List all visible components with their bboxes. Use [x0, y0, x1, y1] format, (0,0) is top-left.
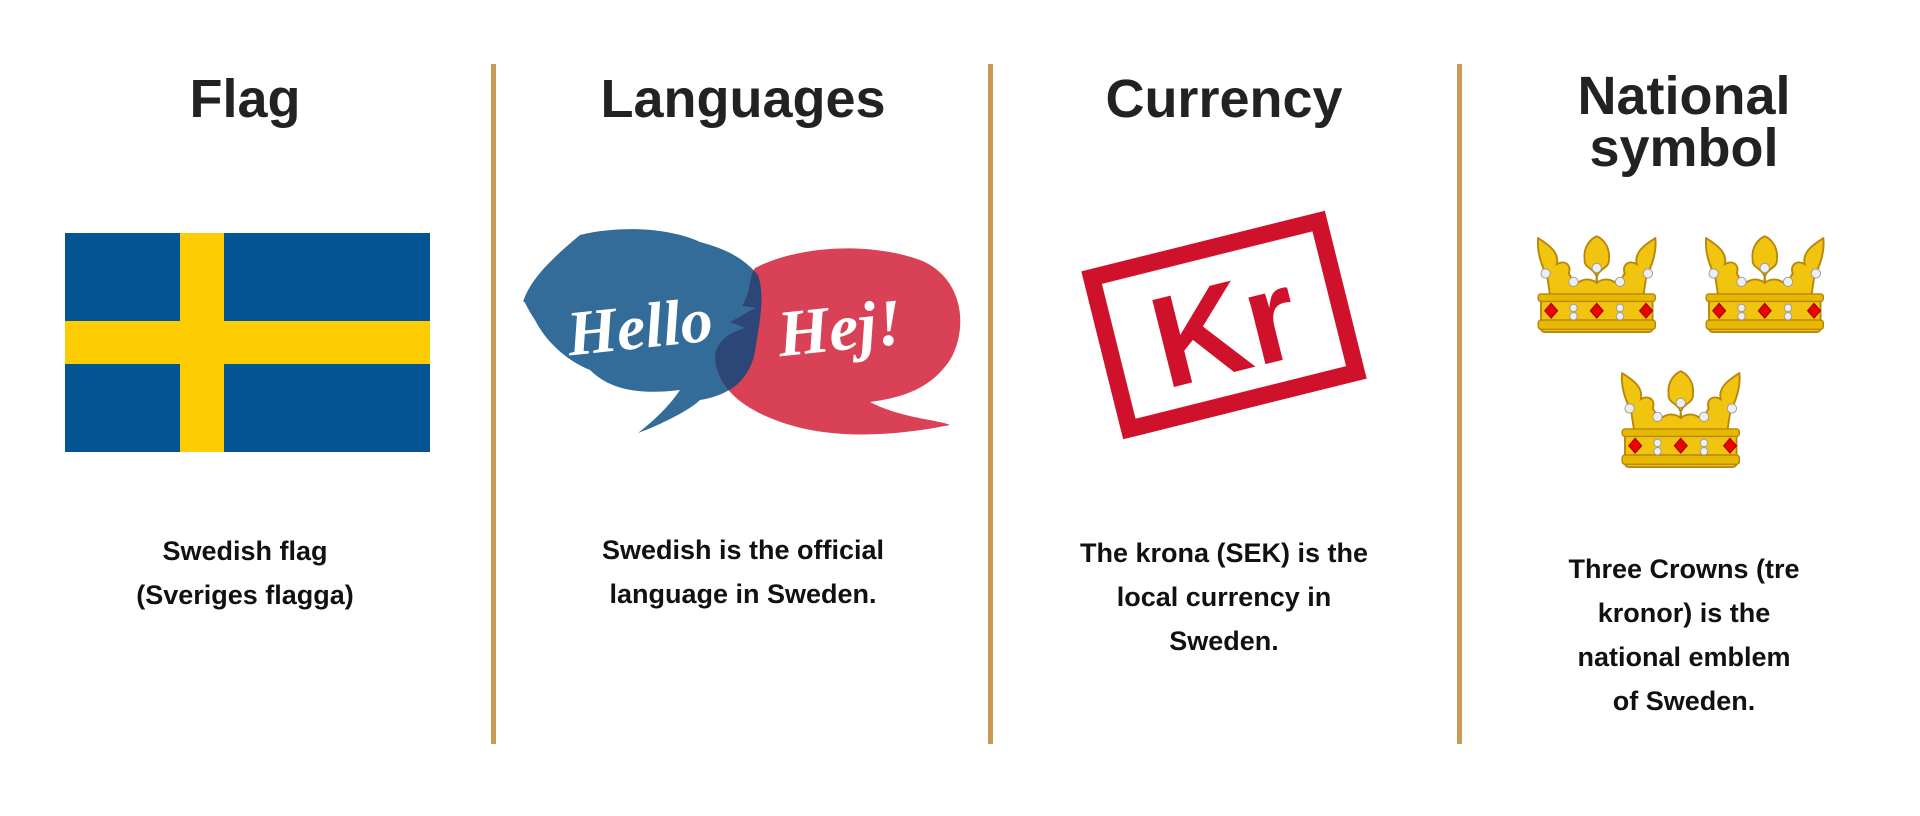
icon: Kr currency sign: [1081, 210, 1367, 440]
caption: national symbol: national emblem: [1577, 642, 1791, 672]
heading: Currency: Currency: [1105, 69, 1343, 129]
icon: speech bubbles Hello Hej: Hello: [562, 284, 716, 370]
caption: flag: Swedish flag: [162, 536, 328, 566]
caption: national symbol: of Sweden.: [1613, 686, 1755, 716]
icon: speech bubbles Hello Hej: [523, 229, 960, 434]
icon: Swedish flag: [65, 233, 430, 452]
heading: National symbol: symbol: [1589, 118, 1779, 178]
caption: languages: [602, 535, 884, 609]
caption: languages: language in Sweden.: [609, 579, 877, 609]
caption: flag: [136, 536, 354, 610]
heading: Flag: Flag: [189, 69, 300, 129]
caption: national symbol: [1568, 554, 1800, 716]
caption: languages: Swedish is the official: [602, 535, 884, 565]
caption: currency: Sweden.: [1169, 626, 1279, 656]
heading: Languages: Languages: [600, 69, 886, 129]
caption: currency: local currency in: [1117, 582, 1331, 612]
caption: flag: (Sveriges flagga): [136, 580, 354, 610]
caption: currency: The krona (SEK) is the: [1080, 538, 1368, 568]
caption: currency: [1080, 538, 1368, 656]
heading: National symbol: National: [1577, 66, 1791, 126]
caption: national symbol: Three Crowns (tre: [1568, 554, 1800, 584]
caption: national symbol: kronor) is the: [1598, 598, 1770, 628]
icon: three crowns: [1536, 235, 1825, 468]
icon: Kr currency sign: Kr: [1137, 240, 1312, 416]
heading: National symbol: [1577, 66, 1791, 178]
icon: speech bubbles Hello Hej: Hej!: [773, 286, 906, 371]
